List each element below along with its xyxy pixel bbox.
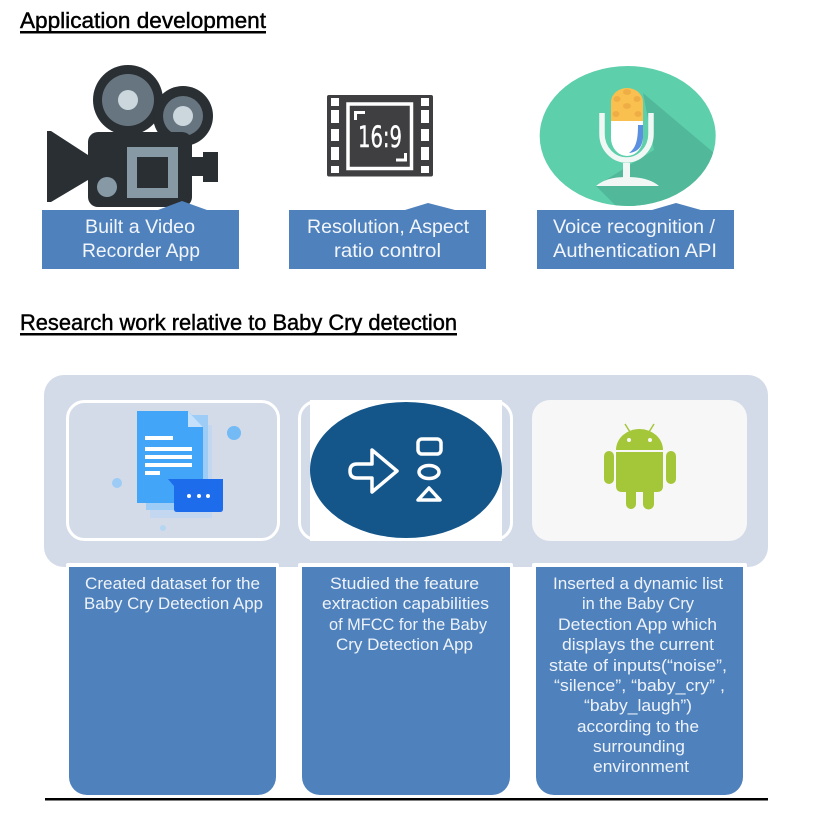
text box: dynamic list: Detection App which: [558, 616, 717, 634]
text box: studied MFCC: [298, 563, 513, 795]
text box: dynamic list: “silence”, “baby_cry” ,: [554, 677, 725, 695]
panel: research icons background: [44, 375, 768, 567]
label: Built a Video Recorder App: [42, 201, 239, 269]
heading: Research work relative to Baby Cry detection: Research work relative to Baby Cry detection: [20, 310, 457, 335]
icon: video camera: [47, 65, 218, 207]
icon: 16:9 film frame: 16:9: [358, 120, 402, 154]
label: Voice recognition / Authentication API: Voice recognition /: [553, 216, 716, 238]
text box: studied MFCC: extraction capabilities: [322, 595, 489, 613]
label: Voice recognition / Authentication API: Authentication API: [553, 240, 717, 262]
label: Resolution, Aspect ratio control: [289, 203, 486, 269]
text box: dynamic list: Inserted a dynamic list: [553, 575, 723, 593]
text box: created dataset: Baby Cry Detection App: [84, 595, 263, 613]
text box: dynamic list: “baby_laugh”): [584, 697, 692, 715]
text box: created dataset: [66, 563, 279, 795]
label: Resolution, Aspect ratio control: ratio control: [334, 240, 441, 262]
text box: dynamic list: in the Baby Cry: [582, 595, 695, 613]
card: dataset document icon: [68, 402, 278, 540]
heading: Application development: Application development: [20, 8, 266, 33]
text box: studied MFCC: Cry Detection App: [336, 636, 473, 654]
text box: dynamic list: according to the: [577, 718, 699, 736]
text box: dynamic list: state of inputs(“noise”,: [549, 657, 727, 675]
text box: studied MFCC: of MFCC for the Baby: [329, 616, 488, 634]
text box: studied MFCC: Studied the feature: [330, 575, 479, 593]
label: Resolution, Aspect ratio control: Resolution, Aspect: [307, 216, 470, 238]
icon: 16:9 film frame: [327, 95, 433, 176]
text box: dynamic list: surrounding: [593, 738, 685, 756]
icon: microphone on green circle: [540, 66, 720, 215]
card: feature extraction flow icon: [300, 400, 512, 541]
card: android icon: [532, 400, 747, 541]
text box: dynamic list: environment: [593, 758, 689, 776]
bottom rule: [45, 798, 768, 800]
text box: dynamic list: [532, 563, 747, 795]
label: Built a Video Recorder App: Built a Video: [85, 216, 195, 238]
label: Built a Video Recorder App: Recorder App: [82, 240, 200, 262]
label: Voice recognition / Authentication API: [537, 203, 734, 269]
text box: created dataset: Created dataset for the: [85, 575, 260, 593]
text box: dynamic list: displays the current: [562, 636, 714, 654]
